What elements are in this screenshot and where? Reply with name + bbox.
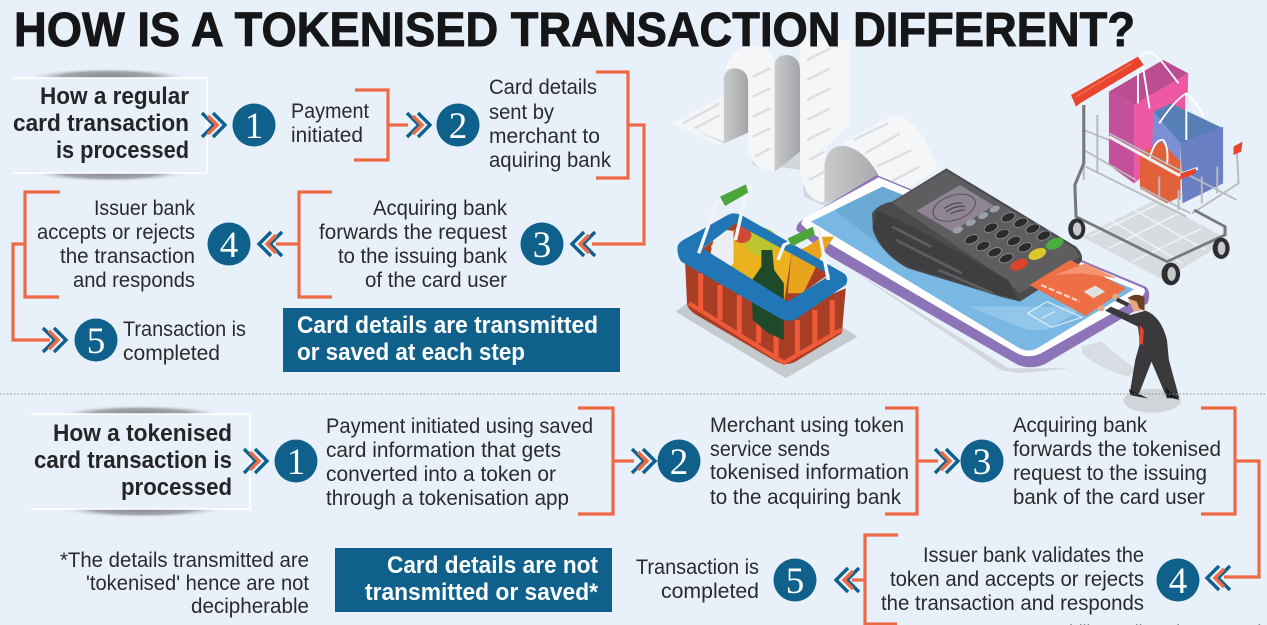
token step 3 text: bank of the card user (1013, 486, 1205, 509)
panel: regular card transaction (13, 68, 644, 372)
step 1 text (291, 100, 369, 147)
token step 2 text: Merchant using token (710, 414, 904, 437)
footnote: decipherable (191, 595, 309, 618)
heading: how a regular card transaction is processed (13, 68, 207, 182)
step 4 text (37, 197, 195, 292)
illustration: payment scene (672, 40, 1242, 413)
step 2 text: merchant to (489, 125, 600, 148)
step 3 text (319, 197, 507, 292)
footnote: 'tokenised' hence are not (86, 572, 309, 595)
token step 3 badge: 3 (973, 442, 991, 483)
orange credit card (1030, 260, 1126, 316)
heading: how a regular card transaction is processed: card transaction (13, 110, 189, 137)
token step 2 text (710, 414, 909, 509)
token step 4 text: token and accepts or rejects (890, 568, 1144, 591)
heading: how a tokenised card transaction is processed (31, 405, 250, 518)
heading: how a regular card transaction is processed: is processed (56, 137, 189, 164)
step 5 badge: 5 (87, 321, 105, 362)
callout: card details not transmitted (335, 548, 612, 612)
bracket and arrow to step 5 (13, 192, 66, 352)
token step 2 text: service sends (710, 438, 830, 461)
step 3 badge: 3 (533, 225, 551, 266)
token step 3 text (1013, 414, 1221, 509)
step 5 text: Transaction is (123, 318, 246, 341)
step 3 badge (520, 222, 564, 266)
token step 1 badge: 1 (287, 442, 305, 483)
card terminal (872, 168, 1082, 302)
panel: tokenised card transaction (31, 405, 1259, 624)
callout: card details transmitted: or saved at each step (297, 339, 525, 366)
bracket and arrow to token step 2 (578, 408, 655, 514)
footnote: *The details transmitted are (60, 549, 309, 572)
token step 2 badge: 2 (670, 442, 688, 483)
token step 2 badge (658, 440, 700, 483)
token step 4 text: Issuer bank validates the (923, 544, 1144, 567)
arrow to step 1 (202, 113, 225, 137)
step 1 text: Payment (291, 100, 369, 123)
step 4 text: the transaction (60, 245, 195, 268)
bracket and arrow to step 3 (572, 72, 644, 256)
token step 3 text: Acquiring bank (1013, 414, 1147, 437)
arrow to token step 1 (244, 449, 267, 473)
token step 4 badge: 4 (1169, 561, 1187, 602)
heading: how a regular card transaction is processed: How a regular (40, 83, 189, 110)
step 1 badge (232, 104, 276, 147)
step 2 text: aquiring bank (489, 149, 611, 172)
token step 3 text: forwards the tokenised (1013, 438, 1221, 461)
token step 1 text: converted into a token or (326, 463, 556, 486)
heading: how a tokenised card transaction is processed: card transaction is (34, 447, 232, 474)
token step 3 text: request to the issuing (1013, 462, 1207, 485)
bracket and arrow to token step 3 (885, 408, 958, 514)
callout: card details transmitted (283, 308, 620, 372)
step 5 badge (74, 318, 118, 362)
callout: card details not transmitted: transmitted or saved* (365, 579, 599, 606)
callout: card details transmitted: Card details are transmitted (297, 312, 598, 339)
step 4 text: and responds (73, 269, 195, 292)
bracket and arrow to token step 5 (836, 535, 898, 624)
step 2 text: sent by (489, 101, 554, 124)
step 4 badge: 4 (220, 225, 238, 266)
step 4 text: Issuer bank (94, 197, 195, 220)
token step 2 text: to the acquiring bank (710, 486, 901, 509)
step 3 text: Acquiring bank (373, 197, 507, 220)
step 5 text: completed (123, 342, 220, 365)
bracket and arrow to step 4 (259, 192, 332, 297)
token step 4 text: the transaction and responds (881, 592, 1144, 615)
step 5 text (123, 318, 246, 365)
token step 1 text: card information that gets (326, 439, 561, 462)
step 2 badge: 2 (449, 106, 467, 147)
step 1 text: initiated (291, 124, 363, 147)
token step 1 text (326, 415, 593, 510)
phone (796, 175, 1149, 373)
footnote (60, 549, 309, 618)
step 3 text: of the card user (365, 269, 507, 292)
token step 5 badge (774, 558, 816, 602)
businessman pushing card (1082, 294, 1181, 413)
token step 5 text: completed (661, 580, 759, 603)
step 4 badge (208, 222, 250, 266)
bracket and arrow to token step 4 (1201, 408, 1259, 590)
step 3 text: forwards the request (319, 221, 507, 244)
heading: how a tokenised card transaction is processed: processed (121, 474, 232, 501)
step 3 text: to the issuing bank (338, 245, 507, 268)
token step 2 text: tokenised information (710, 461, 909, 484)
token step 4 text (881, 544, 1144, 615)
step 2 text (489, 76, 611, 172)
token step 1 badge (274, 440, 318, 483)
step 4 text: accepts or rejects (37, 221, 195, 244)
token step 1 text: Payment initiated using saved (326, 415, 593, 438)
step 2 text: Card details (489, 76, 597, 99)
shopping basket (675, 184, 857, 378)
token step 4 badge (1156, 558, 1200, 602)
callout: card details not transmitted: Card details are not (387, 552, 598, 579)
heading: how a tokenised card transaction is processed: How a tokenised (53, 420, 232, 447)
bracket and arrow to step 2 (354, 90, 430, 160)
title: HOW IS A TOKENISED TRANSACTION DIFFERENT? (14, 4, 1135, 57)
token step 3 badge (960, 440, 1004, 483)
token step 1 text: through a tokenisation app (326, 487, 569, 510)
token step 5 badge: 5 (786, 561, 804, 602)
shopping cart with bags (1068, 52, 1242, 285)
token step 5 text: Transaction is (636, 556, 759, 579)
receipt paper roll (672, 40, 939, 208)
step 1 badge: 1 (245, 106, 263, 147)
step 2 badge (436, 104, 480, 147)
token step 5 text (636, 556, 759, 603)
